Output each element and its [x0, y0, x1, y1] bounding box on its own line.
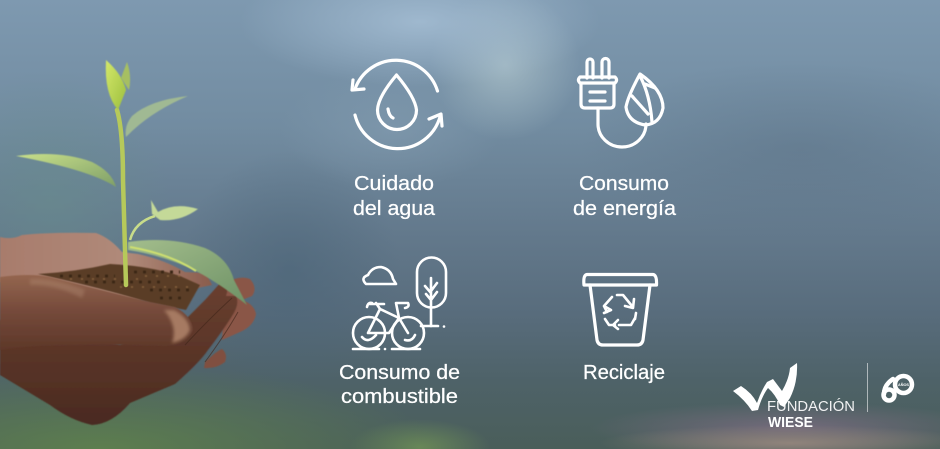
finger creases [185, 298, 238, 362]
label: Cuidado del agua: Cuidado [354, 173, 434, 195]
label: Consumo de combustible: combustible [341, 386, 458, 408]
label: Consumo de combustible [339, 362, 460, 408]
hand shadow [30, 279, 85, 298]
logo ribbon mark [733, 363, 797, 411]
large lower leaf [128, 240, 247, 305]
logo: Fundación Wiese: WIESE [768, 415, 813, 431]
label: Consumo de energía: de energía [573, 198, 677, 220]
seedling stem [117, 110, 126, 285]
logo divider [867, 363, 868, 412]
thumb highlight [164, 310, 190, 343]
left leaf [16, 154, 116, 187]
label: Consumo de energía: Consumo [579, 173, 669, 195]
small right leaf [151, 200, 198, 220]
icon: bicycle, tree and cloud [353, 258, 446, 350]
logo: 60 años: AÑOS [898, 382, 909, 387]
label: Consumo de combustible: Consumo de [339, 362, 460, 384]
logo: Fundación Wiese [733, 363, 855, 431]
photo: hands holding seedling [0, 60, 256, 425]
back hand [0, 233, 212, 300]
top leaves [106, 60, 126, 110]
pinky fingertip [204, 349, 226, 368]
logo: 60 años [884, 376, 912, 400]
icon: water cycle [352, 60, 442, 149]
middle and ring fingertips [222, 278, 256, 340]
icon: plug and leaf [578, 59, 663, 147]
thumb and front hand [0, 275, 193, 350]
soil [38, 264, 200, 310]
upper right leaf [126, 96, 188, 137]
icon: recycling bin [584, 274, 657, 345]
logo wordmark: FUNDACIÓN [767, 398, 855, 415]
label: Cuidado del agua [353, 173, 436, 220]
label: Reciclaje: Reciclaje [583, 362, 665, 384]
label: Cuidado del agua: del agua [353, 198, 436, 220]
lower hand and fingers [0, 281, 237, 425]
label: Consumo de energía [573, 173, 677, 220]
